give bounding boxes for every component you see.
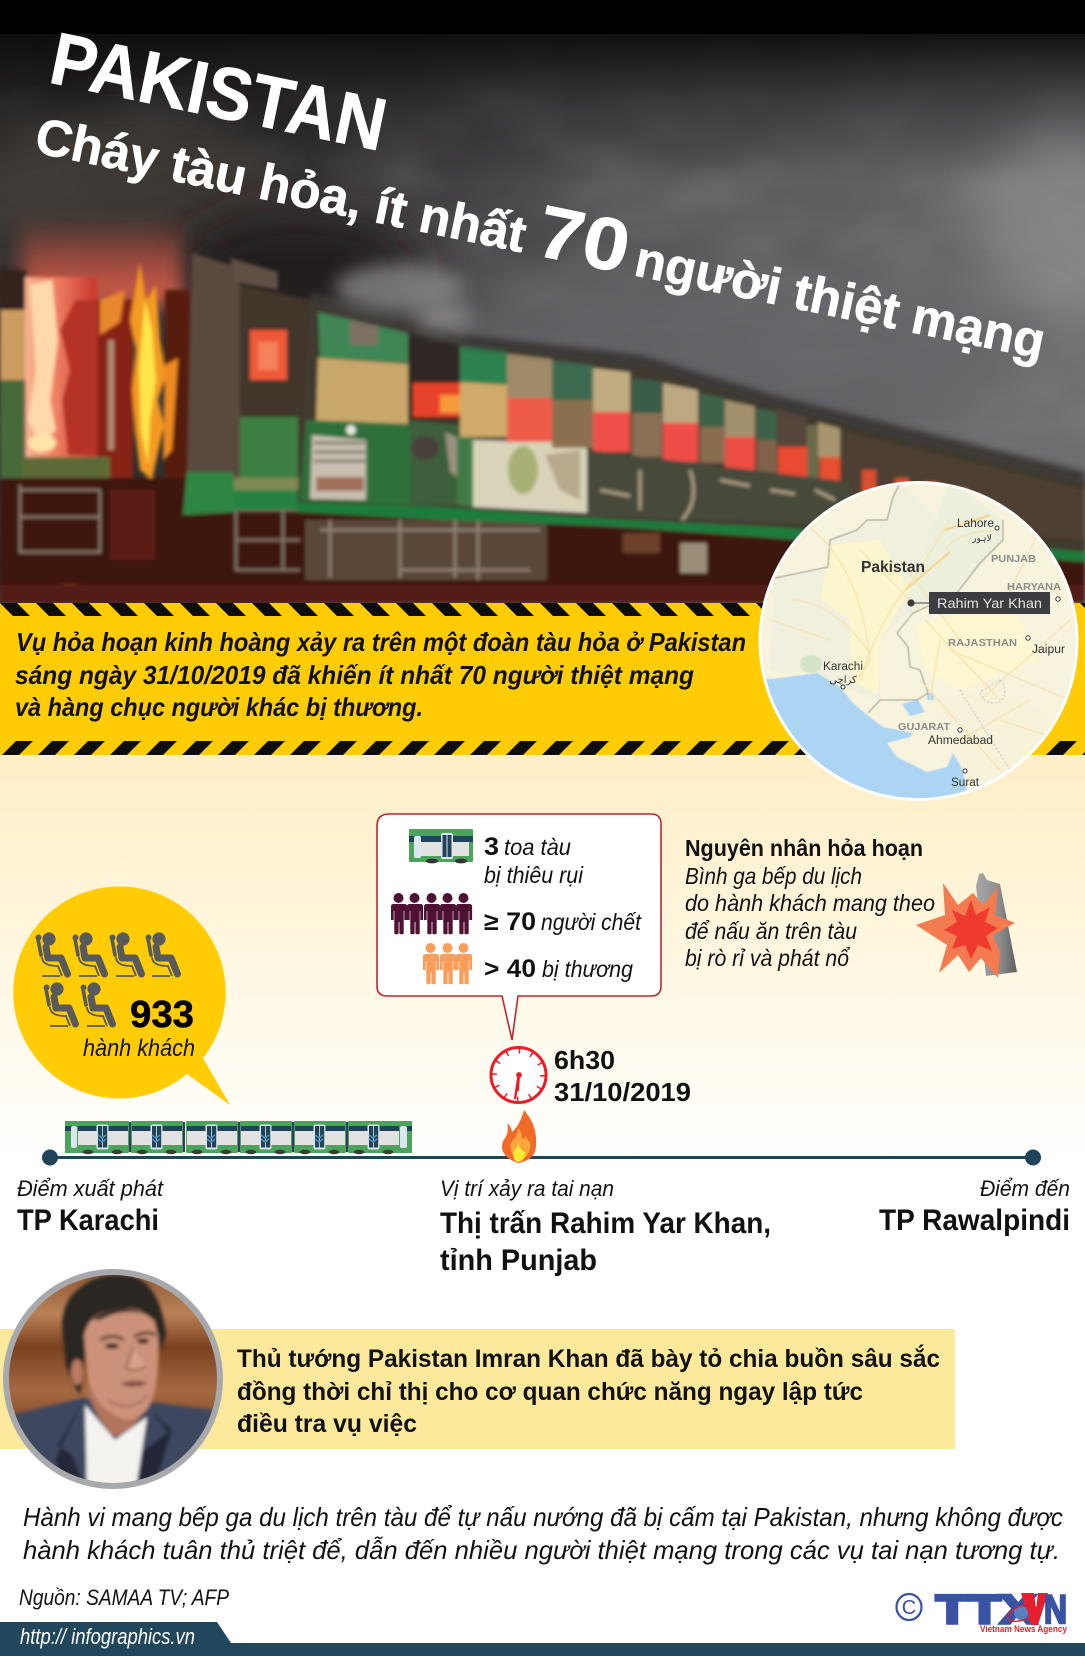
top black bar [0, 0, 1085, 34]
map: location of Rahim Yar Khan [755, 478, 1083, 806]
map labels: PUNJAB [991, 553, 1036, 565]
title: Pakistan: PAKISTAN [44, 16, 394, 167]
icon: injured people [423, 943, 472, 984]
stat: carriages burned: bị thiêu rụi [484, 862, 584, 888]
panel: prime minister statement [0, 1329, 955, 1449]
logo: TTXVN: C [902, 1597, 916, 1619]
callout: casualties box [377, 814, 661, 1040]
map marker: Rahim Yar Khan: Rahim Yar Khan [937, 595, 1042, 611]
summary text: và hàng chục người khác bị thương. [15, 692, 423, 722]
main carriage body [297, 300, 1085, 562]
map labels: لاہور [971, 533, 992, 543]
label: destination: Điểm đến [980, 1176, 1070, 1201]
footer url: http:// infographics.vn [20, 1624, 195, 1649]
summary text: sáng ngày 31/10/2019 đã khiến ít nhất 70 người thiệt mạng [15, 660, 694, 690]
logo: TTXVN [896, 1588, 1067, 1634]
left burning carriage [0, 262, 192, 489]
map labels: Jaipur [1032, 644, 1065, 656]
label: destination: TP Rawalpindi [879, 1204, 1070, 1237]
statement text: Thủ tướng Pakistan Imran Khan đã bày tỏ chia buồn sâu sắc [237, 1343, 940, 1373]
text block: cause of fire: bị rò rỉ và phát nổ [685, 945, 850, 971]
stat: deaths: ≥ 70 [484, 908, 536, 936]
passenger number: 933 [130, 994, 194, 1036]
map labels: Pakistan [861, 559, 925, 576]
underframe [0, 478, 1085, 603]
text block: closing note: hành khách tuân thủ triệt để, dẫn đến nhiều người thiệt mạng trong các vụ tai nạn tương tự. [23, 1535, 1060, 1565]
panel: cream background [0, 755, 1085, 1165]
label: accident location: Thị trấn Rahim Yar Khan, [440, 1207, 771, 1240]
stat: carriages burned: 3 [484, 833, 499, 861]
label: accident location [440, 1176, 771, 1277]
fire glow above left carriage [22, 215, 182, 305]
label: accident location: Vị trí xảy ra tai nạn [440, 1176, 614, 1201]
label: departure point: Điểm xuất phát [17, 1176, 164, 1201]
summary text: Vụ hỏa hoạn kinh hoàng xảy ra trên một đoàn tàu hỏa ở Pakistan [16, 627, 746, 657]
map labels: GUJARAT [898, 721, 951, 733]
map labels [823, 516, 1065, 789]
icon: train carriage [409, 829, 473, 863]
passenger caption: hành khách [83, 1035, 195, 1062]
stat: deaths: người chết [541, 909, 642, 935]
statement text [237, 1343, 940, 1438]
summary text [15, 627, 746, 722]
subtitle rotated line: Cháy tàu hỏa, ít nhất [31, 107, 531, 263]
map labels: Lahore [957, 516, 994, 530]
panel: yellow summary band [0, 603, 1085, 755]
map labels: Ahmedabad [928, 735, 993, 747]
icon: dead people [391, 893, 472, 934]
title [30, 16, 1054, 375]
text block: cause of fire [685, 835, 935, 971]
subtitle rotated line: 70 [530, 189, 637, 289]
stat: deaths [484, 908, 642, 936]
icon: flame on timeline [502, 1110, 536, 1163]
label: departure point [17, 1176, 164, 1237]
source: Nguồn: SAMAA TV; AFP [19, 1585, 229, 1610]
logo: TTXVN: TTX [936, 1588, 1036, 1632]
icon: train on timeline [65, 1121, 412, 1154]
statement text: điều tra vụ việc [237, 1410, 417, 1438]
label: destination [879, 1176, 1070, 1237]
icon: passenger seats [36, 932, 178, 1026]
icon: clock [491, 1048, 546, 1102]
text block: cause of fire: Bình ga bếp du lịch [685, 863, 862, 889]
statement text: đồng thời chỉ thị cho cơ quan chức năng ngay lập tức [237, 1378, 863, 1406]
callout: passenger count bubble [13, 886, 230, 1105]
text block: closing note [23, 1502, 1063, 1565]
logo: TTXVN: Vietnam News Agency [980, 1624, 1067, 1634]
map labels: Karachi [823, 661, 863, 673]
accident time: 6h30 [554, 1045, 615, 1075]
logo: TTXVN: N [1044, 1588, 1067, 1632]
stat: injured: bị thương [542, 956, 633, 982]
text block: cause of fire: do hành khách mang theo [685, 890, 935, 916]
subtitle rotated line: người thiệt mạng [630, 230, 1050, 370]
map labels: HARYANA [1007, 581, 1061, 593]
label: accident location: tỉnh Punjab [440, 1244, 597, 1277]
timeline [42, 1150, 1041, 1166]
accident time: 31/10/2019 [554, 1077, 691, 1107]
portrait: Imran Khan [3, 1269, 225, 1495]
accident time [554, 1045, 691, 1107]
map labels: RAJASTHAN [948, 637, 1017, 649]
stat: injured [484, 955, 633, 983]
stat: carriages burned: toa tàu [504, 834, 571, 860]
footer bar [0, 1622, 1085, 1656]
subtitle rotated line [30, 86, 1054, 375]
icon: exploding gas canister [916, 873, 1017, 978]
stat: injured: > 40 [484, 955, 536, 983]
photo: burning train [0, 34, 1085, 603]
text block: cause of fire: để nấu ăn trên tàu [685, 918, 857, 944]
text block: cause of fire: Nguyên nhân hỏa hoạn [685, 835, 923, 861]
map labels: کراچی [829, 675, 857, 686]
stat: carriages burned [484, 833, 584, 888]
map labels: Surat [951, 777, 980, 789]
map marker: Rahim Yar Khan [907, 592, 1050, 614]
vestibule [183, 253, 312, 515]
label: departure point: TP Karachi [17, 1204, 159, 1237]
